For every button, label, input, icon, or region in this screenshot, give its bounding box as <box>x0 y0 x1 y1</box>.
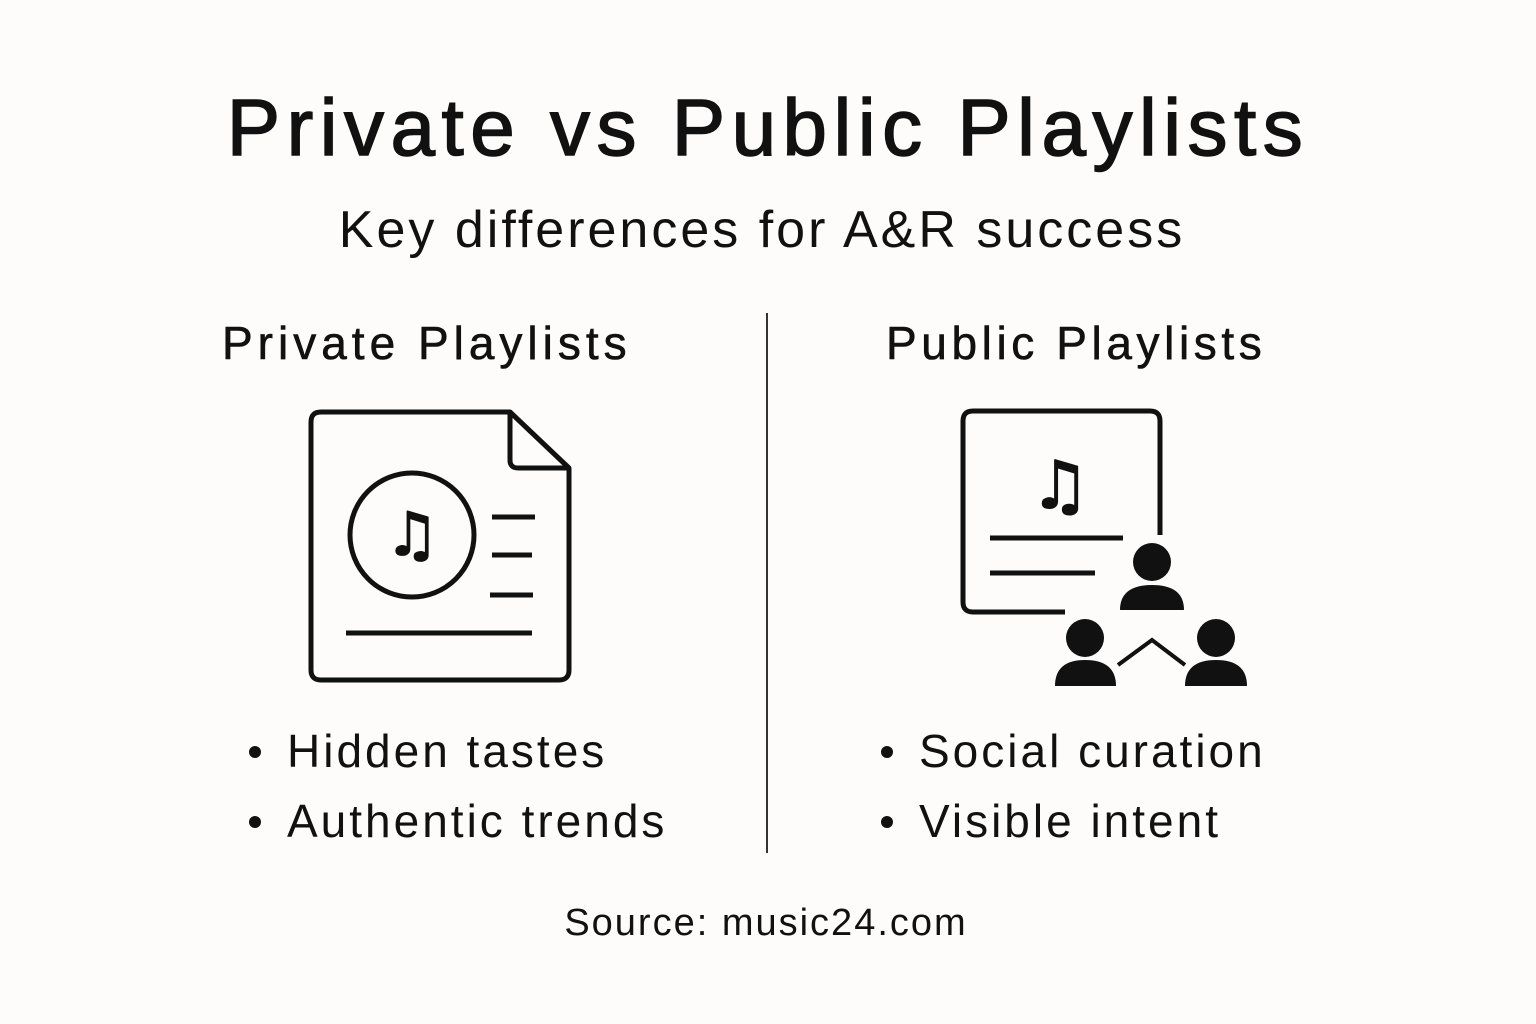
bullets: private <box>249 725 667 847</box>
panel: public <box>881 317 1266 847</box>
heading: private: Private Playlists <box>222 317 632 369</box>
heading: public: Public Playlists <box>886 317 1266 369</box>
bullets: private: Hidden tastes <box>287 725 607 777</box>
bullets: public: Social curation <box>919 725 1266 777</box>
divider <box>766 313 768 853</box>
bullets: private: Authentic trends <box>287 795 667 847</box>
bullets: public <box>881 725 1266 847</box>
subtitle: Key differences for A&R success <box>339 201 1185 259</box>
source note: Source: music24.com <box>564 902 968 944</box>
title: Private vs Public Playlists <box>227 83 1309 172</box>
panel: private <box>222 317 667 847</box>
icon: private document <box>308 410 572 682</box>
icon: private document: ♫ <box>385 500 439 570</box>
bullets: public: Visible intent <box>919 795 1221 847</box>
icon: shared playlist with people: ♫ <box>1030 447 1090 524</box>
icon: shared playlist with people <box>960 408 1247 686</box>
